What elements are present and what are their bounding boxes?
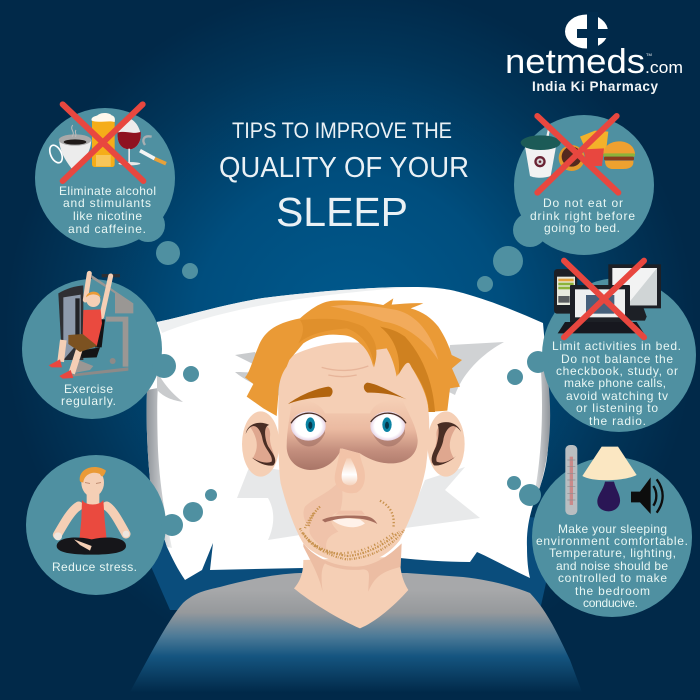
left ear xyxy=(242,411,279,477)
caption: checkbook, study, or xyxy=(556,364,678,378)
logo trademark: TM xyxy=(646,52,652,57)
illustration: tired man xyxy=(242,298,465,628)
neck and head xyxy=(80,467,106,505)
nose xyxy=(335,448,365,493)
stubble xyxy=(300,501,404,559)
eyebrows xyxy=(288,383,407,404)
caption xyxy=(61,382,116,408)
neck shadow xyxy=(303,543,402,592)
logo: netmeds xyxy=(505,12,683,94)
caption: Exercise xyxy=(64,382,113,396)
illustration: grey shirt xyxy=(130,573,582,692)
caption: environment comfortable. xyxy=(536,534,688,548)
caption: make phone calls, xyxy=(564,376,666,390)
beer xyxy=(92,113,115,167)
tank top xyxy=(79,500,107,540)
thermometer xyxy=(565,445,577,515)
fries xyxy=(580,131,608,166)
hair xyxy=(245,298,462,416)
left eye xyxy=(291,411,326,441)
legs xyxy=(57,538,126,555)
cheek shadow xyxy=(303,480,342,552)
panel: do not eat xyxy=(477,115,654,292)
caption xyxy=(59,184,156,236)
caption: avoid watching tv xyxy=(566,389,668,403)
caption: and noise should be xyxy=(556,559,668,573)
arms xyxy=(57,506,126,535)
panel: eliminate stimulants xyxy=(35,104,198,279)
caption: and caffeine. xyxy=(68,222,146,236)
caption: the bedroom xyxy=(575,584,650,598)
panel: comfortable environment xyxy=(507,445,692,617)
caption: drink right before xyxy=(530,209,635,223)
nose highlight xyxy=(342,458,357,485)
title line 1: TIPS TO IMPROVE THE xyxy=(232,118,452,143)
under-eye mask xyxy=(287,400,418,470)
title line 3: SLEEP xyxy=(276,189,408,235)
burger xyxy=(603,141,635,169)
caption: or listening to xyxy=(576,401,658,415)
right eye xyxy=(370,411,406,441)
caption xyxy=(530,196,635,235)
caption: controlled to make xyxy=(558,571,667,585)
thought bubble xyxy=(507,278,696,432)
laptop xyxy=(558,285,644,333)
caption: regularly. xyxy=(61,394,116,408)
foot xyxy=(74,539,92,551)
caption: Make your sleeping xyxy=(558,522,667,536)
lamp xyxy=(582,447,637,511)
red cross xyxy=(564,261,644,337)
wine xyxy=(118,119,141,165)
title xyxy=(219,118,469,235)
phone xyxy=(554,269,577,314)
face xyxy=(278,342,429,563)
caption: Reduce stress. xyxy=(52,560,137,574)
thought bubble xyxy=(477,115,654,292)
red cross xyxy=(537,116,618,193)
title line 2: QUALITY OF YOUR xyxy=(219,152,469,184)
panel: exercise xyxy=(22,273,199,419)
machine xyxy=(58,274,133,377)
icons: thermometer, lamp, speaker xyxy=(565,445,663,515)
logo wordmark: netmeds xyxy=(505,43,645,81)
icon: meditating man xyxy=(54,467,129,555)
icon: man on exercise machine xyxy=(49,273,133,379)
caption: conducive. xyxy=(583,596,638,610)
caption: going to bed. xyxy=(544,221,620,235)
caption xyxy=(536,522,688,610)
coffee xyxy=(47,125,91,169)
donut xyxy=(559,145,585,171)
illustration: pillow xyxy=(147,287,550,580)
caption: like nicotine xyxy=(73,209,142,223)
mouth xyxy=(322,511,377,527)
monitor xyxy=(608,264,661,321)
speaker xyxy=(631,477,663,514)
logo domain: .com xyxy=(645,58,683,77)
logo tagline: India Ki Pharmacy xyxy=(532,79,658,94)
neck xyxy=(294,557,408,628)
caption: and stimulants xyxy=(63,196,151,210)
icons: monitor, phone, laptop xyxy=(554,261,661,337)
caption: Do not eat or xyxy=(543,196,623,210)
caption: the radio. xyxy=(589,414,646,428)
red cross xyxy=(63,104,143,181)
mattress band xyxy=(135,500,560,610)
logo icon xyxy=(565,12,608,52)
eye bags xyxy=(293,427,325,446)
caption: Eliminate alcohol xyxy=(59,184,156,198)
thought bubble xyxy=(35,108,198,279)
thought bubble xyxy=(22,279,199,419)
drink cup xyxy=(521,127,561,178)
forehead wrinkles xyxy=(322,366,368,377)
caption: Limit activities in bed. xyxy=(552,339,681,353)
thought bubble xyxy=(507,457,692,617)
right ear xyxy=(427,411,465,477)
panel: limit activities xyxy=(507,261,696,432)
icons: coffee, beer, wine, cigarette xyxy=(47,104,166,181)
hands xyxy=(54,532,62,540)
thought bubble xyxy=(26,455,217,595)
caption: Temperature, lighting, xyxy=(549,546,676,560)
caption xyxy=(552,339,681,428)
icons: drink, donut, fries, burger xyxy=(521,116,635,193)
caption: Do not balance the xyxy=(561,352,673,366)
panel: reduce stress xyxy=(26,455,217,595)
cigarette xyxy=(140,136,166,164)
person xyxy=(49,273,111,379)
